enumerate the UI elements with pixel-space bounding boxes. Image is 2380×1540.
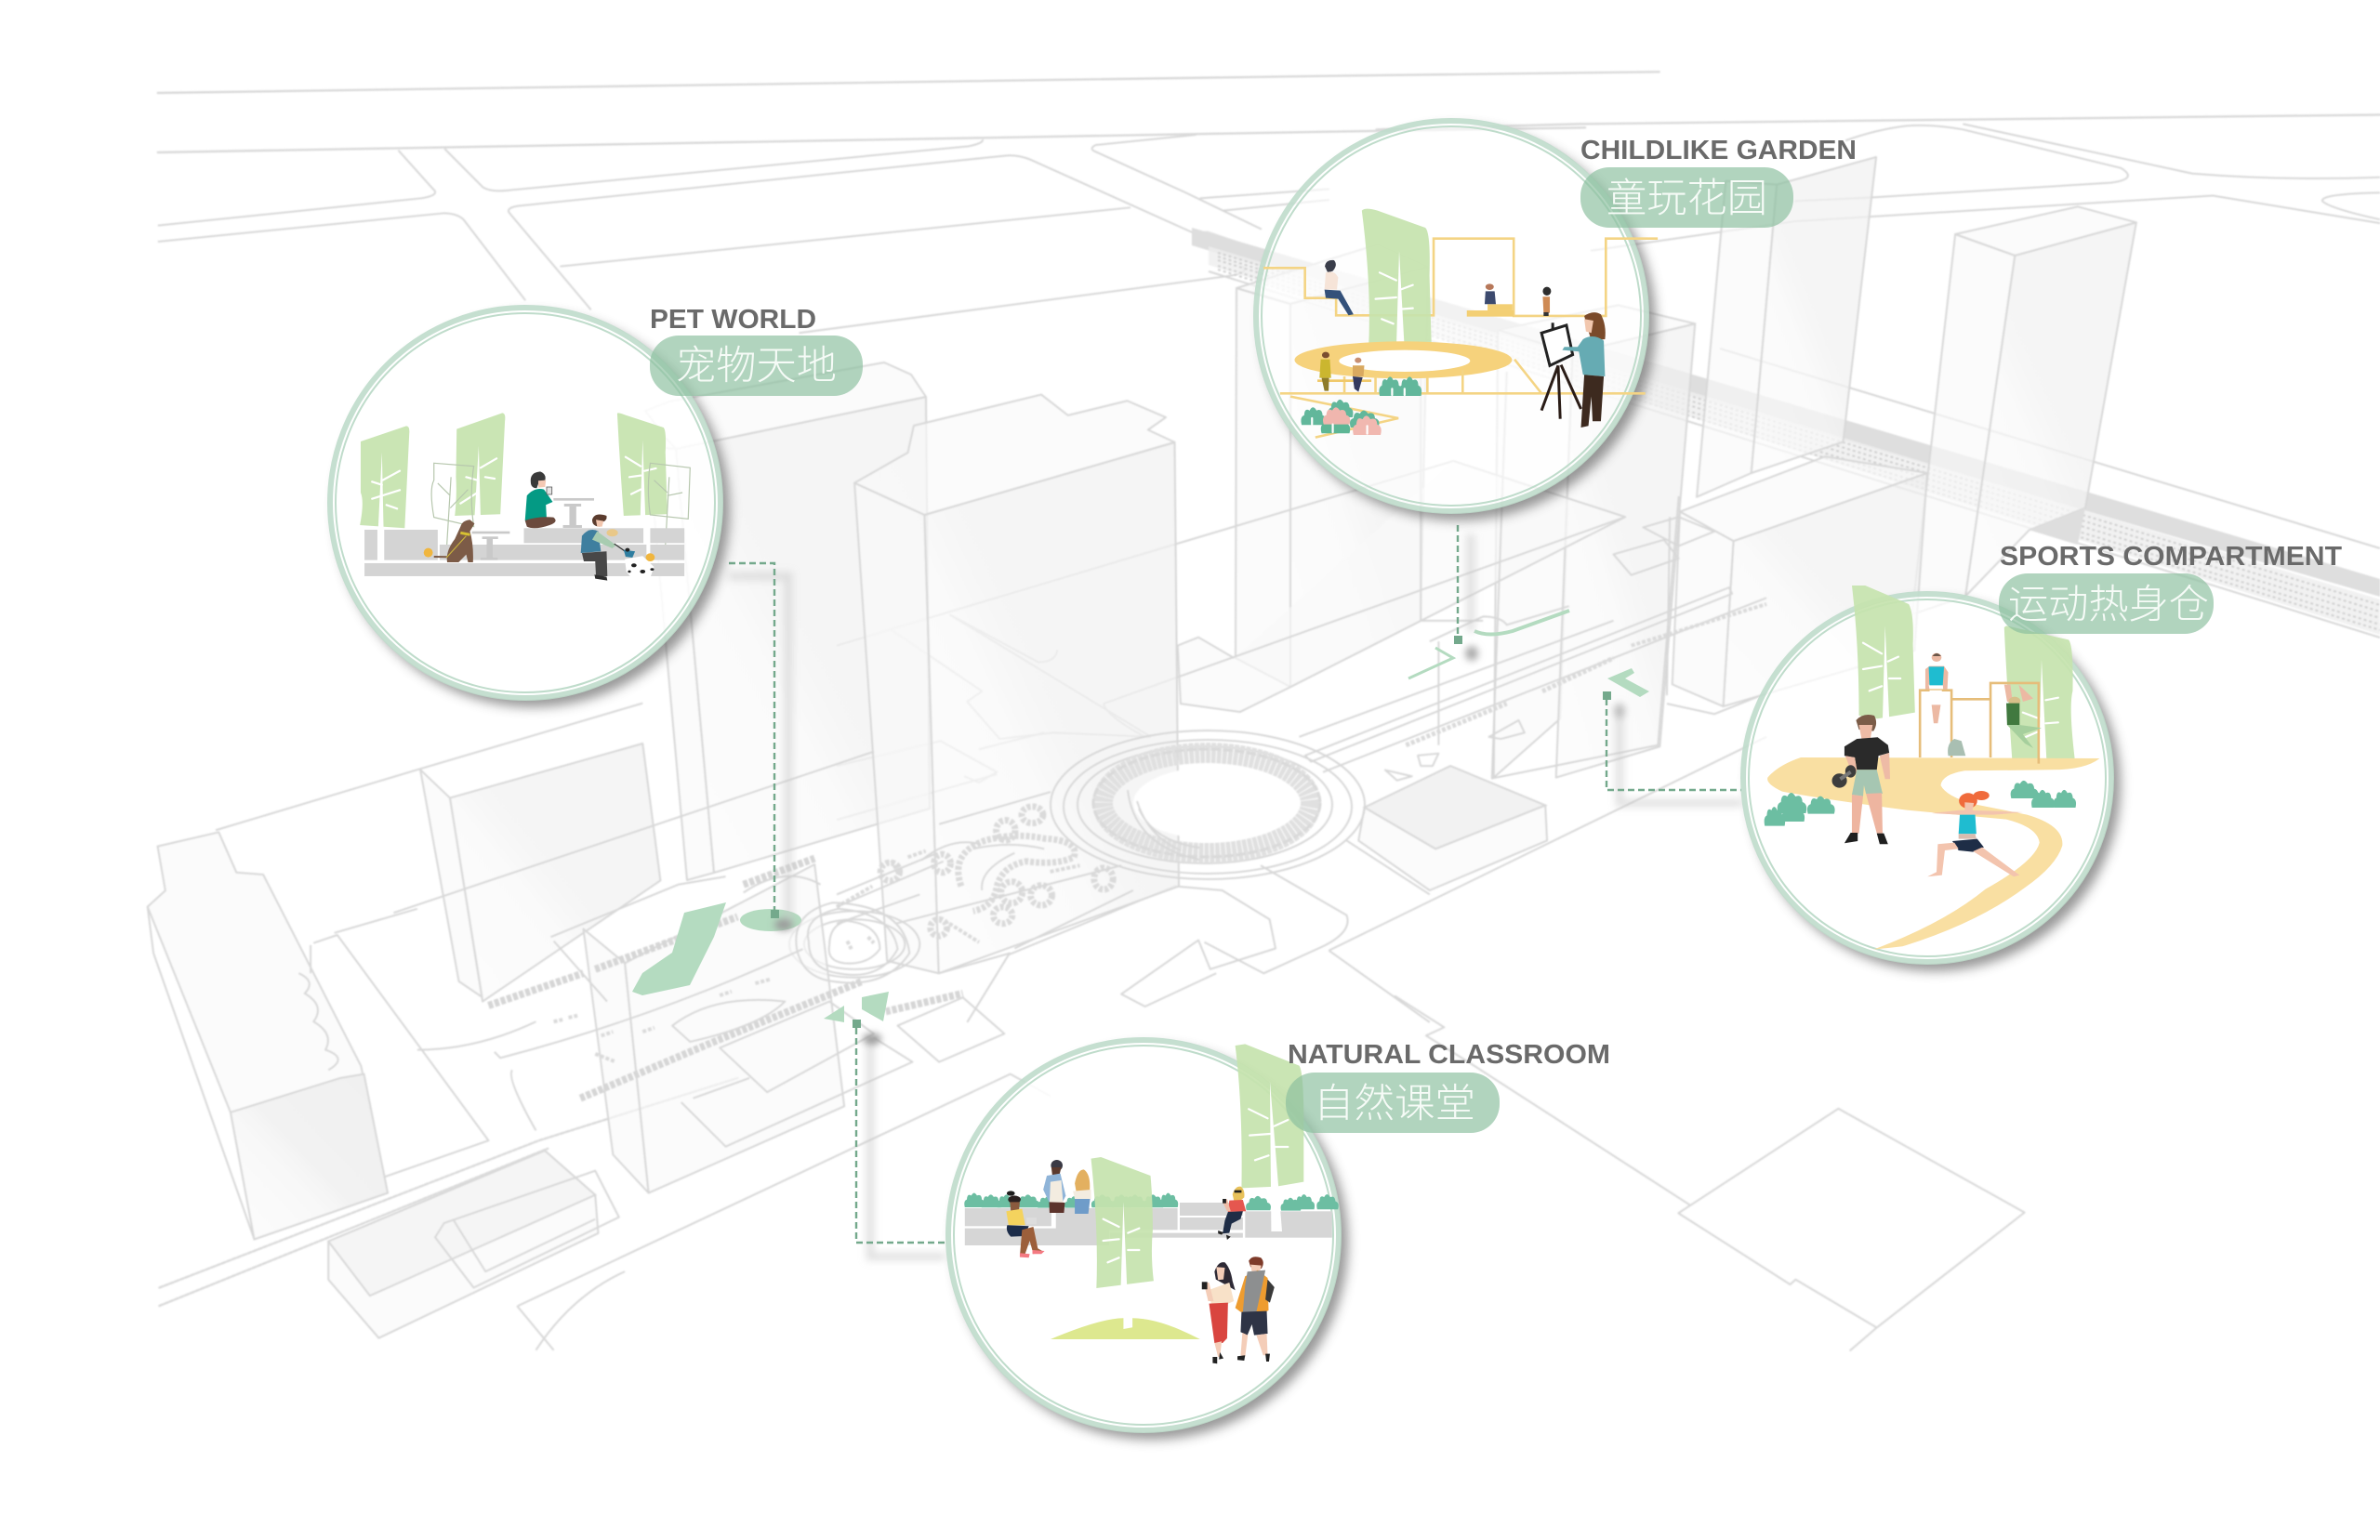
seated man and dalmatian <box>581 515 654 581</box>
pet world pill: 宠物天地 <box>676 344 837 388</box>
elevated rail corridor <box>1192 228 2380 638</box>
woman in lunge <box>1927 791 2023 876</box>
childlike garden english title: CHILDLIKE GARDEN <box>1580 136 1857 165</box>
outline trees <box>431 463 690 551</box>
ground plots: plaza north <box>837 372 1766 1022</box>
woman in red <box>1218 1187 1246 1240</box>
tower: central large <box>854 395 1179 973</box>
patch: childlike curve <box>1474 611 1569 634</box>
childlike garden circle frame <box>1256 121 1656 520</box>
childlike garden pill <box>1580 167 1793 228</box>
easel <box>1541 322 1581 419</box>
patch: pet world oval <box>740 909 801 931</box>
circle panel: pet world <box>330 308 730 707</box>
low block: east podium <box>1673 456 1927 706</box>
small child standing <box>1542 287 1551 316</box>
sports compartment pill <box>1999 573 2214 634</box>
woman painting <box>1562 312 1606 428</box>
trees <box>1091 1044 1303 1289</box>
childlike garden pill: 童玩花园 <box>1606 177 1767 221</box>
natural classroom english title: NATURAL CLASSROOM <box>1288 1040 1610 1070</box>
bench seat <box>1317 379 1371 382</box>
green site patches <box>632 611 1649 1022</box>
circle panel: childlike garden <box>1256 121 1658 520</box>
woman with laptop <box>1006 1191 1045 1257</box>
left low rise towers <box>148 704 1051 1350</box>
bearded man <box>1043 1160 1065 1213</box>
leader: sports compartment <box>1603 691 1741 790</box>
yellow platform <box>1467 304 1514 317</box>
trees <box>1852 586 2075 769</box>
patch: natural classroom small <box>824 1006 844 1022</box>
west plaza line work <box>417 792 1051 1193</box>
patch: natural classroom <box>862 992 889 1021</box>
road network, upper right <box>1377 114 2380 251</box>
tower: west of childlike garden <box>1236 244 1428 687</box>
hedge rows <box>964 1193 1339 1211</box>
mound <box>1051 1318 1200 1339</box>
pet world pill <box>650 336 863 396</box>
circle panel: natural classroom <box>948 1040 1348 1440</box>
person with phone <box>525 471 556 528</box>
patch: sports chevron <box>1607 668 1649 697</box>
pull-up bars <box>1920 683 2039 764</box>
pet toys <box>424 548 654 561</box>
patch: childlike chevron <box>1408 648 1453 678</box>
south-east empty plot outline <box>1395 995 2025 1351</box>
seated adult <box>1325 260 1354 315</box>
label: childlike garden <box>1580 136 1857 228</box>
natural classroom circle frame <box>948 1040 1348 1440</box>
pet world circle frame <box>330 308 730 707</box>
tower: far right <box>1912 206 2136 614</box>
man on parallel bars <box>1925 653 1949 723</box>
tables <box>472 498 594 560</box>
tower: behind childlike garden <box>1494 305 1695 778</box>
tower: upper centre <box>1697 157 1876 497</box>
child on bench <box>1353 358 1364 392</box>
trees <box>360 413 668 560</box>
running track <box>1767 757 2099 950</box>
label: pet world <box>650 305 863 396</box>
label: sports compartment <box>1999 542 2342 634</box>
natural classroom pill <box>1286 1073 1500 1133</box>
stepped seating <box>364 528 684 576</box>
road network, upper left <box>158 72 1659 333</box>
central tree <box>1362 209 1432 350</box>
sports compartment scene <box>1765 586 2099 950</box>
leader: natural classroom <box>853 1020 945 1243</box>
pet world english title: PET WORLD <box>650 305 816 335</box>
man in yellow <box>1319 352 1331 391</box>
leader shadows <box>729 534 1741 1257</box>
base map: site axonometric line drawing <box>148 72 2380 1351</box>
garden paths, centre <box>789 807 1133 978</box>
man with dumbbell <box>1832 715 1890 844</box>
tower: behind pet world <box>645 362 930 880</box>
natural classroom scene <box>964 1044 1339 1363</box>
natural classroom pill: 自然课堂 <box>1314 1082 1475 1126</box>
pet world scene <box>360 413 690 581</box>
leader: pet world <box>729 563 779 918</box>
woman hanging <box>2004 685 2042 748</box>
label: natural classroom <box>1286 1040 1610 1133</box>
roundabout plaza <box>1051 731 1365 879</box>
blonde woman <box>1073 1169 1091 1214</box>
leader: childlike garden <box>1454 525 1462 644</box>
sports compartment english title: SPORTS COMPARTMENT <box>2000 542 2342 572</box>
dog sitting <box>434 520 474 562</box>
bench supports and floor <box>1280 360 1646 438</box>
yellow play frame <box>1263 239 1658 316</box>
stepped wall <box>965 1203 1332 1245</box>
sports compartment pill: 运动热身仓 <box>2008 583 2209 627</box>
couple <box>1202 1257 1275 1363</box>
childlike garden scene <box>1263 209 1658 438</box>
circle panel: sports compartment <box>1743 586 2121 971</box>
ring bench <box>1294 341 1512 378</box>
small child seated <box>1485 283 1496 304</box>
shrubs <box>1765 781 2076 826</box>
bushes teal and pink <box>1301 376 1421 435</box>
sports compartment circle frame <box>1743 594 2121 971</box>
gym bag <box>1948 739 1965 756</box>
patch: pet world lawn <box>632 902 726 995</box>
